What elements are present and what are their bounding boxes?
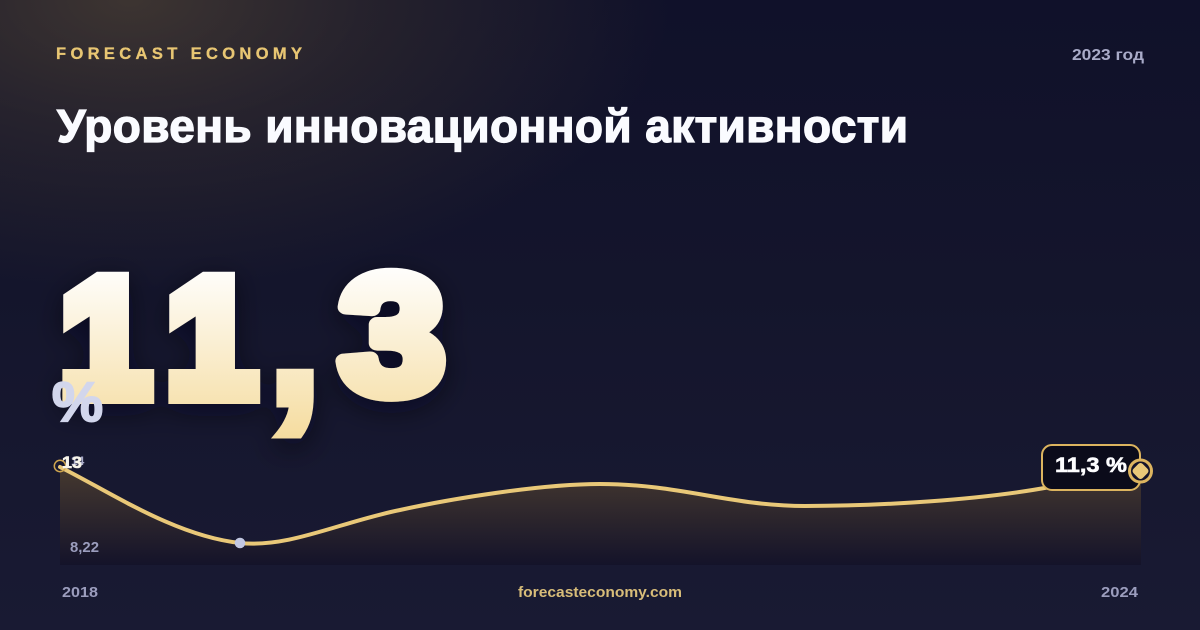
chart area fill bbox=[60, 467, 1141, 565]
area chart bbox=[60, 467, 1141, 565]
start year: 2018 bbox=[62, 584, 98, 601]
percent sign: % bbox=[52, 370, 103, 433]
end point marker bbox=[1130, 460, 1152, 482]
brand label: FORECAST ECONOMY bbox=[56, 45, 302, 63]
year label: 2023 год bbox=[1072, 47, 1144, 64]
start point marker bbox=[54, 460, 66, 472]
callout text: 11,3 % bbox=[1055, 454, 1127, 477]
big number: 3 bbox=[340, 240, 444, 428]
callout box bbox=[1042, 445, 1140, 490]
minimum point marker bbox=[235, 538, 245, 548]
big number: 1 bbox=[167, 246, 256, 431]
minimum value label: 8,22 bbox=[70, 540, 99, 556]
website: forecasteconomy.com bbox=[518, 584, 682, 601]
big number: , bbox=[267, 223, 323, 446]
title: Уровень инновационной активности bbox=[57, 100, 908, 152]
big number bbox=[61, 223, 444, 446]
chart line bbox=[60, 467, 1141, 544]
value callout bbox=[1042, 445, 1140, 490]
end year: 2024 bbox=[1101, 584, 1139, 601]
start value label: 13 bbox=[62, 453, 82, 472]
big number: 1 bbox=[61, 246, 150, 431]
hidden start label: 14 bbox=[71, 454, 85, 468]
